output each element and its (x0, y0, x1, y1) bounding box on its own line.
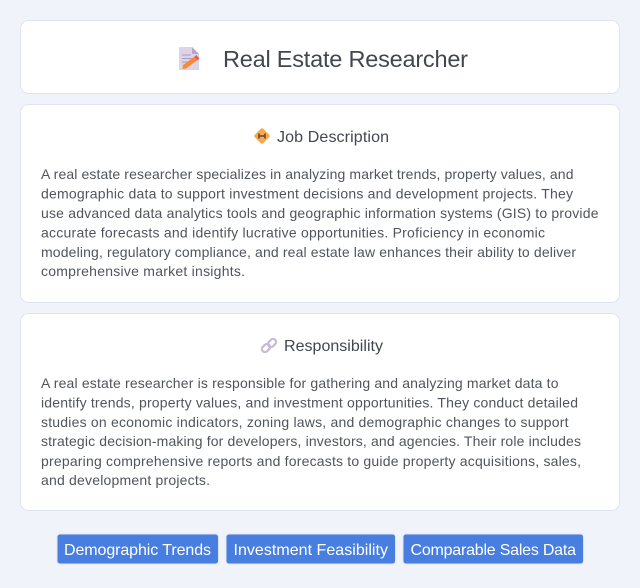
icon: orange diamond (254, 128, 270, 144)
panel: job description (20, 104, 620, 302)
text block: job description: accurate forecasts and identify lucrative opportunities. Proficiency in economic (41, 224, 545, 240)
panel: responsibility (20, 314, 620, 510)
text block: responsibility: studies on economic indicators, zoning laws, and demographic changes to support (41, 414, 569, 430)
text block: responsibility: identify trends, property values, and investment opportunities. They conduct detailed (41, 394, 578, 410)
text block: job description: modeling, regulatory compliance, and real estate law enhances their ability to deliver (41, 244, 576, 260)
panel: header (20, 20, 620, 94)
icon: document with pencil (179, 47, 200, 70)
text block: responsibility: strategic decision-making for developers, investors, and agencies. Their role includes (41, 433, 581, 449)
tag: comparable sales data (403, 534, 584, 564)
heading: responsibility: Responsibility (284, 338, 383, 355)
text block: job description: use advanced data analytics tools and geographic information systems (GIS) to provide (41, 205, 599, 221)
tag: comparable sales data: Comparable Sales Data (410, 542, 576, 559)
text block: job description (41, 166, 599, 279)
icon: link (261, 338, 277, 353)
text block: job description: demographic data to support investment decisions and development projects. They (41, 186, 573, 202)
heading: job description: Job Description (277, 129, 389, 146)
text block: responsibility: preparing comprehensive reports and forecasts to guide property acquisitions, sales, (41, 453, 581, 469)
text block: job description: A real estate researcher specializes in analyzing market trends, property values, and (41, 166, 574, 182)
text block: responsibility: A real estate researcher is responsible for gathering and analyzing market data to (41, 375, 559, 391)
tag: demographic trends (57, 534, 218, 564)
text block: job description: comprehensive market insights. (41, 263, 245, 279)
title: Real Estate Researcher (223, 46, 468, 72)
tag: investment feasibility: Investment Feasibility (234, 542, 388, 559)
text block: responsibility: and development projects. (41, 472, 210, 488)
tag: demographic trends: Demographic Trends (64, 542, 211, 559)
text block: responsibility (41, 375, 581, 488)
tag: investment feasibility (226, 534, 396, 564)
